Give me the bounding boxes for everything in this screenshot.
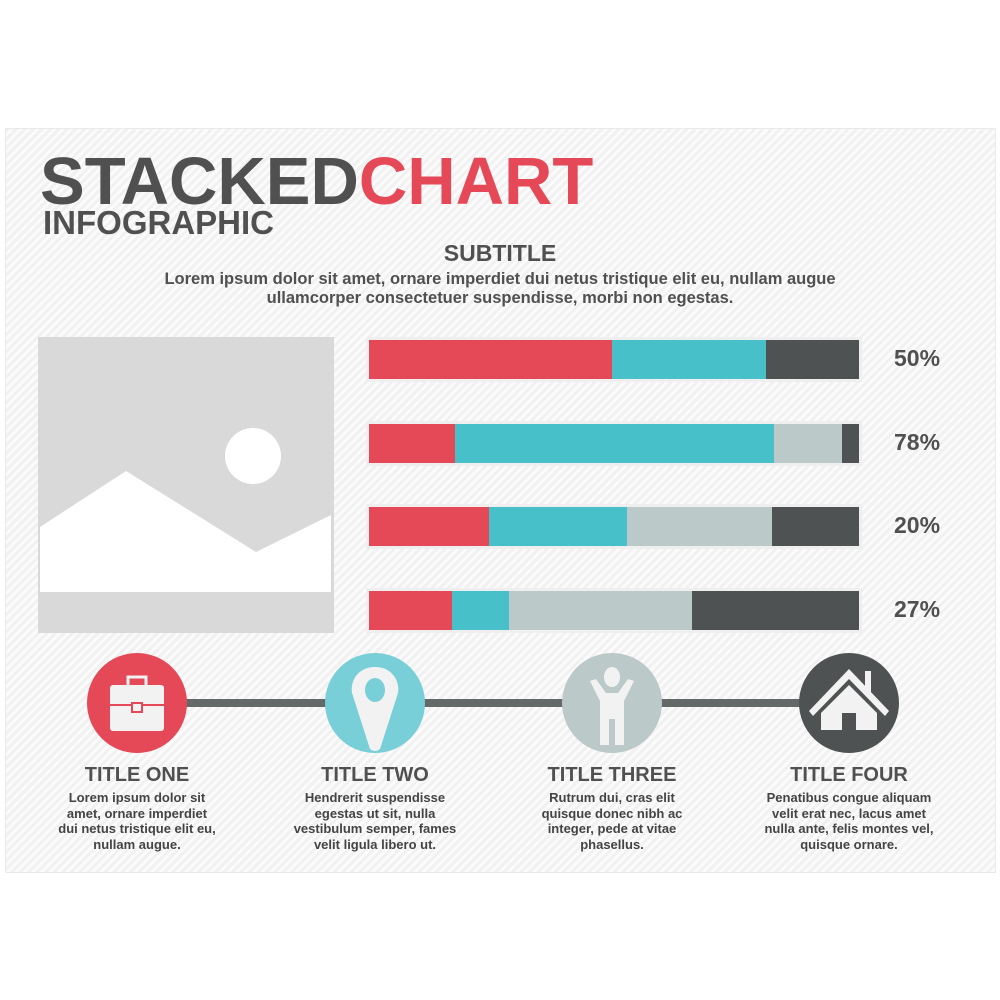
text four: nulla ante, felis montes vel,	[764, 821, 934, 836]
bar row 1	[366, 337, 862, 382]
text four	[764, 790, 934, 852]
icon: person	[562, 653, 662, 753]
step 1	[58, 764, 216, 852]
intro text	[164, 270, 836, 307]
timeline connector	[137, 699, 849, 707]
bar chart: 27%	[894, 596, 940, 622]
text four: Penatibus congue aliquam	[767, 790, 931, 805]
image placeholder	[38, 337, 334, 633]
step 3	[542, 764, 682, 852]
text two: vestibulum semper, fames	[294, 821, 456, 836]
text three: phasellus.	[580, 836, 644, 852]
title: STACKEDCHART	[40, 144, 593, 219]
background panel	[5, 128, 996, 873]
title three: TITLE THREE	[548, 764, 676, 786]
bar row 4	[366, 588, 862, 633]
title one: TITLE ONE	[85, 764, 189, 786]
text two: Hendrerit suspendisse	[305, 790, 445, 805]
intro text: Lorem ipsum dolor sit amet, ornare imperdiet dui netus tristique elit eu, nullam augue	[164, 270, 836, 288]
intro text: ullamcorper consectetuer suspendisse, morbi non egestas.	[267, 289, 733, 307]
text two: velit ligula libero ut.	[314, 836, 436, 852]
bar row 2	[366, 421, 862, 466]
bar chart: 20%	[894, 512, 940, 538]
text four: velit erat nec, lacus amet	[772, 806, 926, 820]
text one: Lorem ipsum dolor sit	[69, 790, 205, 805]
icon: house	[799, 653, 899, 753]
step 2	[294, 764, 456, 852]
bar chart: 78%	[894, 429, 940, 455]
text three	[542, 790, 682, 852]
text two	[294, 790, 456, 852]
text three: integer, pede at vitae	[548, 821, 676, 836]
icon: briefcase	[87, 653, 187, 753]
title two: TITLE TWO	[321, 764, 429, 786]
step 4	[764, 764, 934, 852]
bar row 3	[366, 504, 862, 549]
percentages: 50%	[894, 345, 940, 371]
text one: amet, ornare imperdiet	[67, 806, 207, 820]
text one: nullam augue.	[93, 836, 181, 852]
title sub: INFOGRAPHIC	[43, 204, 274, 241]
text one	[58, 790, 216, 852]
text three: Rutrum dui, cras elit	[549, 790, 675, 805]
text four: quisque ornare.	[800, 836, 898, 852]
text three: quisque donec nibh ac	[542, 806, 682, 820]
bar chart	[366, 337, 940, 633]
text one: dui netus tristique elit eu,	[58, 821, 216, 836]
subtitle: SUBTITLE	[444, 240, 556, 266]
icon: location pin	[325, 653, 425, 753]
text two: egestas ut sit, nulla	[315, 806, 435, 820]
title four: TITLE FOUR	[790, 764, 908, 786]
